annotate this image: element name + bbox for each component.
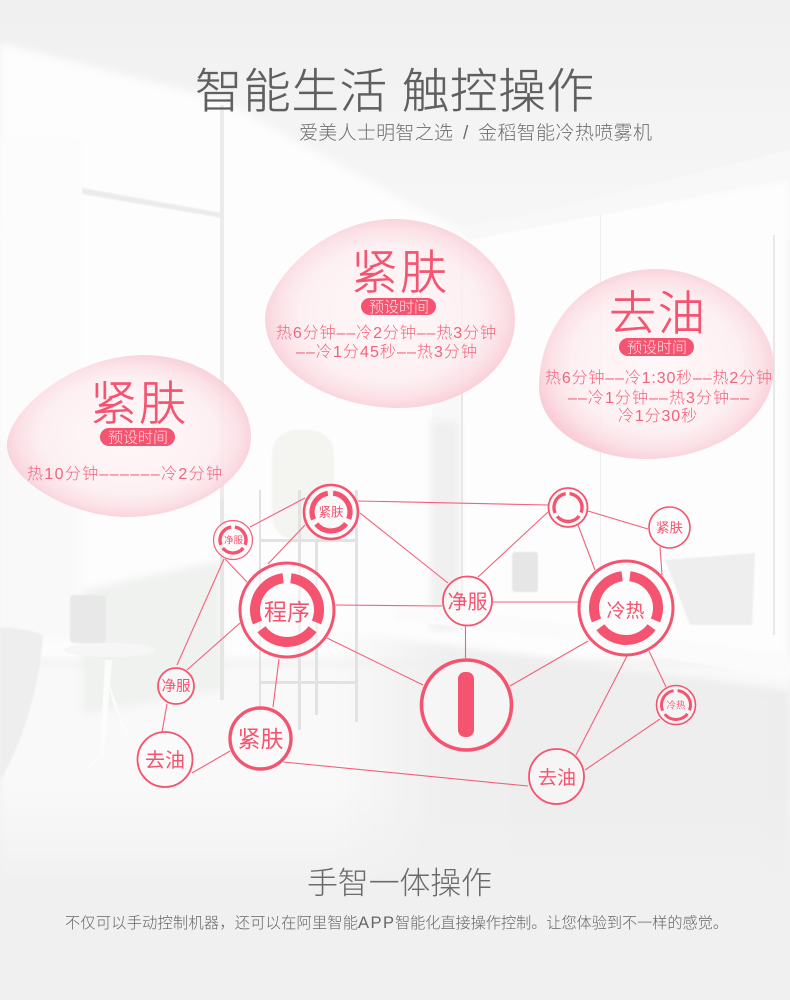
subtitle: 金稻智能冷热喷雾机 — [478, 122, 652, 144]
description text: 智能化直接操作控制。让您体验到不一样的感觉。 — [395, 915, 728, 932]
node: top right small ring — [548, 488, 588, 527]
node: 紧肤 top ring — [304, 485, 358, 539]
node: 冷热 large ring: 冷热 — [606, 600, 645, 622]
node: 净服 small ring — [214, 520, 252, 560]
node: 净服 center: 净服 — [448, 590, 488, 614]
panel: right preset bubble 去油: 冷1分30秒 — [618, 407, 697, 425]
node: 净服 small ring: 净服 — [224, 534, 244, 546]
node: 紧肤 middle — [230, 708, 291, 769]
node: 紧肤 top ring: 紧肤 — [318, 504, 344, 520]
panel: right preset bubble 去油: 预设时间 — [627, 340, 687, 356]
node: 去油 left — [138, 732, 192, 787]
node: 程序 large ring — [240, 563, 334, 657]
node: 紧肤 middle: 紧肤 — [238, 726, 284, 752]
node: 去油 left: 去油 — [145, 749, 185, 772]
node: 程序 large ring: 程序 — [264, 599, 310, 625]
description text — [65, 914, 728, 932]
node: power button — [422, 660, 512, 750]
panel: middle preset bubble 紧肤: 预设时间 — [369, 299, 429, 316]
subtitle — [299, 122, 652, 144]
panel: left preset bubble 紧肤 — [7, 355, 251, 517]
subtitle: 爱美人士明智之选 — [299, 122, 453, 144]
subtitle: / — [463, 123, 469, 144]
panel: right preset bubble 去油: 热6分钟––冷1:30秒––热2分钟 — [545, 369, 772, 387]
panel: left preset bubble 紧肤: 预设时间 — [108, 430, 168, 446]
panel: middle preset bubble 紧肤: ––冷1分45秒––热3分钟 — [296, 343, 477, 361]
network connector lines — [162, 498, 666, 786]
panel: left preset bubble 紧肤: 热10分钟––––––冷2分钟 — [27, 465, 222, 483]
panel: left preset bubble 紧肤: 紧肤 — [90, 377, 186, 430]
node: 紧肤 right — [649, 507, 690, 548]
node: 净服 left: 净服 — [162, 678, 191, 695]
node: 紧肤 right: 紧肤 — [656, 520, 684, 536]
panel: middle preset bubble 紧肤 — [265, 219, 515, 408]
description text: APP — [358, 914, 394, 932]
node: 净服 left — [158, 668, 194, 704]
panel: middle preset bubble 紧肤: 热6分钟––冷2分钟––热3分钟 — [276, 324, 496, 342]
title: 智能生活 触控操作 — [195, 66, 594, 119]
description text: 不仅可以手动控制机器，还可以在阿里智能 — [65, 915, 358, 932]
node: 冷热 small ring — [656, 686, 696, 724]
panel: right preset bubble 去油 — [539, 269, 774, 459]
panel: right preset bubble 去油: ––冷1分钟––热3分钟–– — [568, 389, 749, 407]
node: 冷热 small ring: 冷热 — [666, 700, 686, 712]
heading: 手智一体操作: 手智一体操作 — [307, 866, 492, 901]
panel: right preset bubble 去油: 去油 — [609, 287, 705, 340]
node: 冷热 large ring — [579, 561, 673, 655]
node: 去油 right — [529, 749, 584, 804]
node: 去油 right: 去油 — [538, 767, 576, 789]
node: 净服 center — [443, 576, 492, 626]
panel: middle preset bubble 紧肤: 紧肤 — [351, 246, 447, 299]
